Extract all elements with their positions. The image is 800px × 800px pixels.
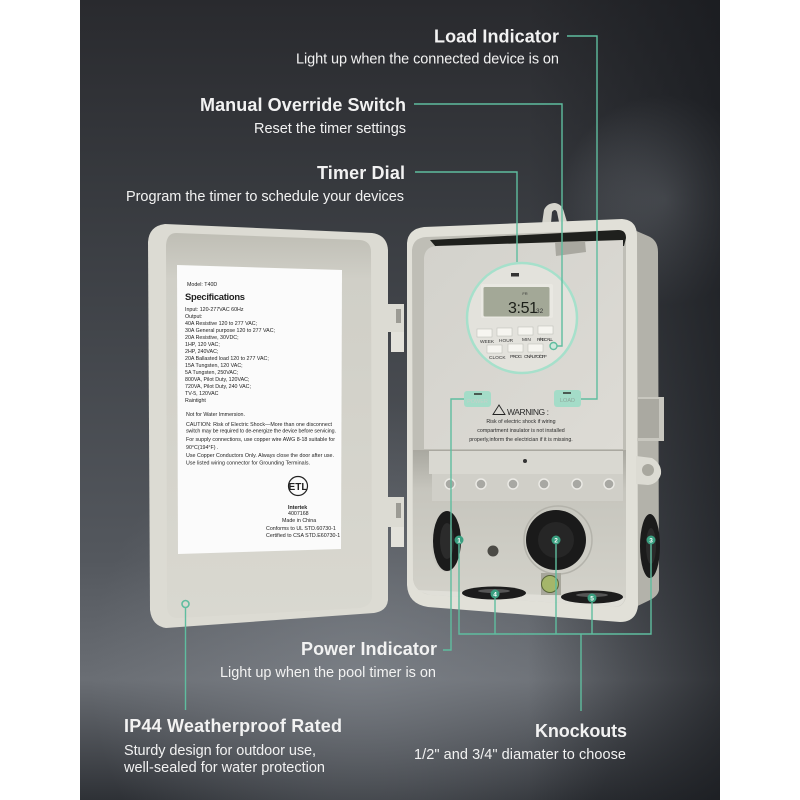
specification label: Model: T40D <box>187 282 217 288</box>
knockout number badges: 4 <box>493 592 497 598</box>
specification label: TV-5, 120VAC <box>185 391 219 397</box>
ground screw <box>541 573 561 595</box>
LCD display: 3:51 <box>508 300 538 317</box>
interior cavity <box>413 450 626 607</box>
warning notice: properly,inform the electrician if it is missing. <box>469 437 573 443</box>
timer dial: R/RECALL <box>537 337 553 343</box>
callout: load indicator: Light up when the connected device is on <box>296 52 559 68</box>
specification label: Not for Water Immersion. <box>186 412 245 418</box>
LCD display: FR <box>522 291 528 296</box>
specification label: Certified to CSA STD.E60730-1 <box>266 533 340 539</box>
faceplate <box>424 240 623 449</box>
specification label: 720VA, Pilot Duty, 240 VAC; <box>185 384 251 390</box>
icon: ETL mark <box>288 476 308 496</box>
specification label: Use Copper Conductors Only. Always close the door after use. <box>186 453 334 459</box>
knockout number badges: 5 <box>590 596 594 602</box>
callout: timer dial: Program the timer to schedule your devices <box>126 189 404 205</box>
callout: manual override switch <box>200 95 406 137</box>
callout: manual override switch: Reset the timer settings <box>254 121 406 137</box>
timer buttons <box>477 326 553 353</box>
LCD display <box>481 284 553 318</box>
specification label: 1HP, 120 VAC; <box>185 342 220 348</box>
specification label: CAUTION: Risk of Electric Shock—More than one disconnect <box>186 422 333 428</box>
open door with specification label <box>148 224 388 628</box>
specification label: 2HP, 240VAC; <box>185 349 218 355</box>
specification label: 800VA, Pilot Duty, 120VAC; <box>185 377 249 383</box>
specification label: 15A Tungsten, 120 VAC; <box>185 363 243 369</box>
warning notice: compartment insulator is not installed <box>477 428 565 434</box>
callout: load indicator: Load Indicator <box>434 26 559 46</box>
callout: IP44 weatherproof rated: well-sealed for water protection <box>123 760 325 776</box>
specification label: 40A Resistive 120 to 277 VAC; <box>185 321 257 327</box>
callout: knockouts: Knockouts <box>535 721 627 741</box>
knockout number badges: 3 <box>649 538 653 544</box>
power indicator label: POWER <box>467 399 488 405</box>
specification label: switch may be required to de-energize the device before servicing. <box>186 428 336 434</box>
icon: ETL mark: ETL <box>289 482 307 493</box>
callout: IP44 weatherproof rated: IP44 Weatherproof Rated <box>124 716 342 736</box>
timer enclosure <box>407 203 664 622</box>
terminal strip <box>429 451 623 474</box>
timer dial: ON/AUTO/OFF <box>524 354 547 360</box>
callout: knockouts <box>414 721 627 763</box>
warning notice: WARNING : <box>507 407 549 417</box>
specification label: 4007168 <box>288 511 309 517</box>
knockout number badges <box>454 536 656 602</box>
specification label: Input: 120-277VAC 60Hz <box>185 307 244 313</box>
callout: IP44 weatherproof rated: Sturdy design for outdoor use, <box>124 743 316 759</box>
timer dial: PROG <box>510 354 522 360</box>
specification label: 90°C(194°F) . <box>186 445 218 451</box>
specification label: Intertek <box>288 505 307 511</box>
callout: timer dial <box>126 163 405 205</box>
callout: knockouts: 1/2" and 3/4" diamater to choose <box>414 747 626 763</box>
specification label: Specifications <box>185 291 245 302</box>
warning notice: Risk of electric shock if wiring <box>486 419 556 425</box>
specification label <box>177 265 342 554</box>
knockout number badges: 2 <box>554 538 558 544</box>
timer dial: CLOCK <box>489 355 506 361</box>
callout: timer dial: Timer Dial <box>317 163 405 183</box>
callout: load indicator <box>296 26 559 68</box>
specification label: 20A Resistive, 30VDC; <box>185 335 239 341</box>
load indicator label <box>554 390 581 407</box>
specification label: 20A Ballasted load 120 to 277 VAC; <box>185 356 269 362</box>
callout: power indicator: Power Indicator <box>301 639 437 659</box>
power indicator label <box>464 391 491 407</box>
timer dial: MIN <box>522 337 531 343</box>
timer dial: WEEK <box>480 339 495 345</box>
timer dial <box>467 261 579 375</box>
knockouts <box>431 506 660 604</box>
callout: manual override switch: Manual Override Switch <box>200 95 406 115</box>
specification label: Made in China <box>282 518 316 524</box>
manual override ring <box>550 342 557 350</box>
specification label: Conforms to UL STD.60730-1 <box>266 526 336 532</box>
warning notice <box>469 405 573 443</box>
weatherproof marker ring <box>182 600 189 608</box>
specification label: For supply connections, use copper wire AWG 8-18 suitable for <box>186 437 335 443</box>
callout: IP44 weatherproof rated <box>123 716 342 776</box>
top shadow gap <box>430 230 626 247</box>
specification label: Raintight <box>185 398 206 404</box>
right ear and clips <box>637 397 664 441</box>
LCD display: 32 <box>536 308 544 315</box>
specification label: 5A Tungsten, 250VAC; <box>185 370 238 376</box>
background panel <box>80 0 720 800</box>
hinges <box>387 304 404 547</box>
specification label: Use listed wiring connector for Grounding Terminals. <box>186 460 310 466</box>
enclosure side wall <box>625 226 659 612</box>
callout: power indicator: Light up when the pool timer is on <box>220 665 436 681</box>
leader lines <box>186 36 651 711</box>
specification label: 30A General purpose 120 to 277 VAC; <box>185 328 275 334</box>
callout: power indicator <box>220 639 437 681</box>
load indicator label: LOAD <box>560 398 575 404</box>
enclosure front rim <box>407 219 638 622</box>
timer dial: HOUR <box>499 338 514 344</box>
specification label: Output: <box>185 314 202 320</box>
knockout number badges: 1 <box>457 538 461 544</box>
hanging tab <box>542 203 567 224</box>
